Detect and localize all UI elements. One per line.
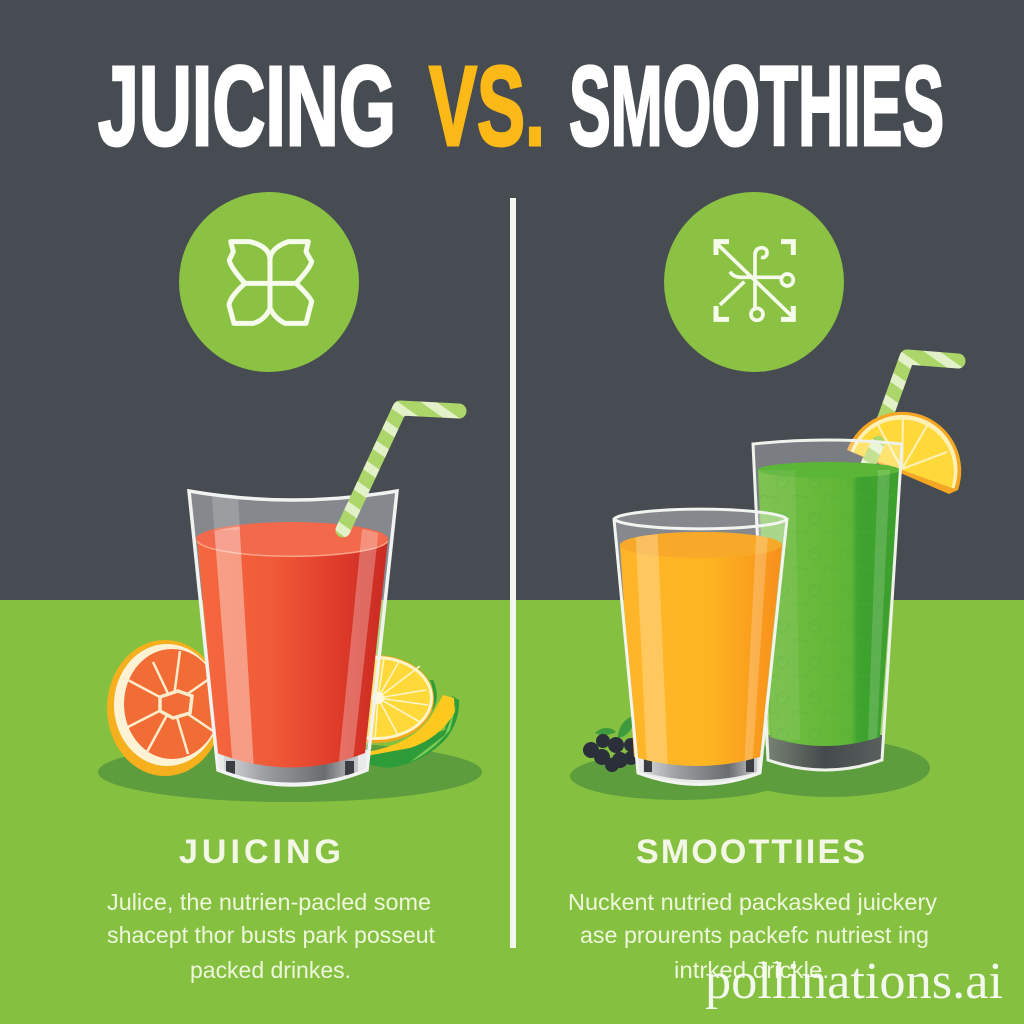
ground shadow <box>98 742 482 802</box>
juicing illustration <box>98 408 482 802</box>
text block: juicing description: packed drinkes. <box>190 957 351 983</box>
lemon wedge <box>847 412 961 494</box>
red juice glass <box>189 491 397 800</box>
grapefruit slice <box>107 640 223 776</box>
icon: nutrient network badge <box>664 192 844 372</box>
orange juice glass <box>614 509 787 795</box>
text block: smoothies description <box>568 889 938 983</box>
center divider <box>510 198 516 948</box>
green smoothie glass <box>753 440 902 775</box>
straw inside glass <box>868 443 878 465</box>
text block: smoothies description: Nuckent nutried packasked juickery <box>568 889 938 915</box>
title word: vs: VS. <box>429 43 545 169</box>
striped straw <box>868 357 958 465</box>
text block: juicing description: shacept thor busts park posseut <box>107 922 436 948</box>
striped straw <box>343 408 459 530</box>
blueberries <box>583 716 638 772</box>
title <box>98 43 944 169</box>
heading: smoothies: SMOOTTIIES <box>636 833 865 871</box>
smoothies illustration <box>570 357 961 800</box>
text block: smoothies description: ase prourents packefc nutriest ing <box>580 922 929 948</box>
ground shadows <box>570 739 930 800</box>
heading: juicing: JUICING <box>179 833 341 871</box>
background: dark upper area <box>0 0 1024 600</box>
background: green lower area <box>0 600 1024 1024</box>
lime and mango slice <box>366 695 459 768</box>
text block: smoothies description: intrked drickle. <box>674 957 829 983</box>
title word: juicing: JUICING <box>98 43 396 169</box>
watermark: pollinations.ai <box>705 953 1003 1010</box>
lemon slice <box>318 655 437 743</box>
text block: juicing description <box>107 889 436 983</box>
text block: juicing description: Julice, the nutrien-pacled some <box>107 889 431 915</box>
icon: leaf clover badge <box>179 192 359 372</box>
